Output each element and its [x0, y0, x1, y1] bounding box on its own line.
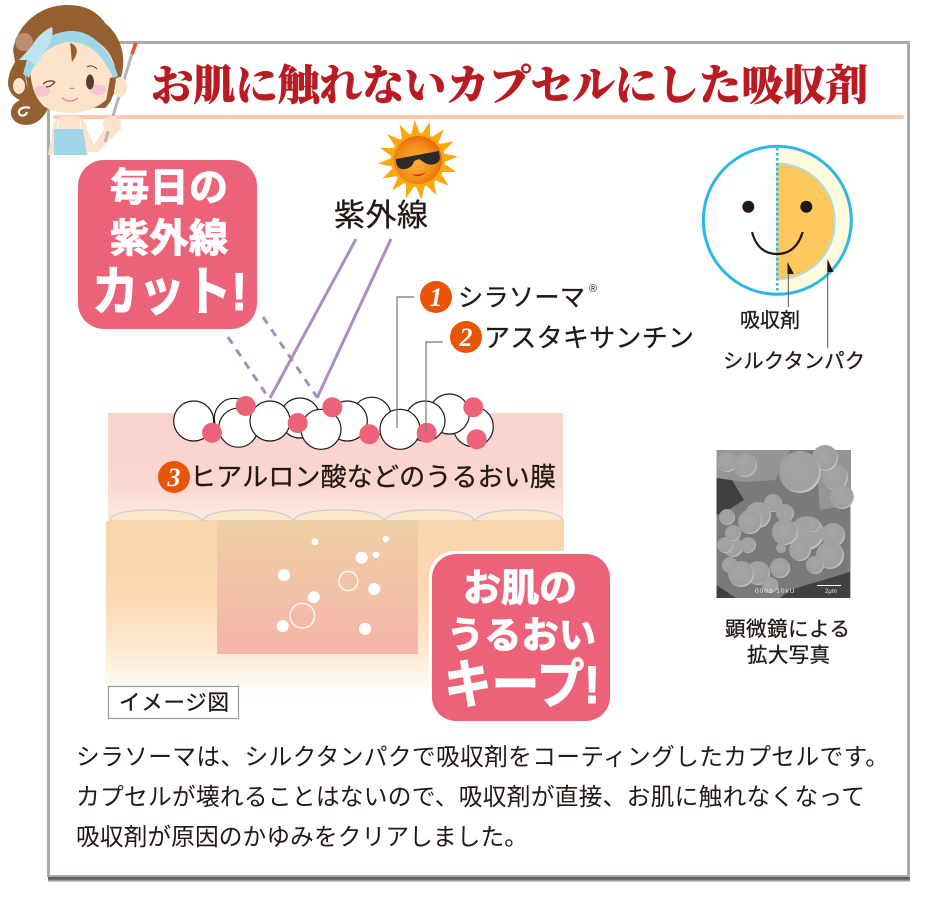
label 3: moisture film: 3 [166, 463, 180, 492]
hand [103, 116, 121, 132]
hair side locks [25, 68, 46, 109]
badge: daily UV cut: カット! [92, 263, 247, 322]
title underline [53, 115, 904, 119]
microscope photo [716, 445, 854, 598]
badge: keep moisture [429, 551, 612, 723]
icon: sun with sunglasses [375, 117, 461, 203]
badge: daily UV cut: 紫外線 [110, 218, 228, 261]
UV rays: dashed [228, 317, 317, 397]
label 1: cilasome: シラソーマ [458, 284, 585, 312]
label 1: cilasome [420, 281, 597, 313]
photo caption: 拡大写真 [747, 644, 830, 667]
body text: 吸収剤が原因のかゆみをクリアしました。 [76, 824, 528, 851]
label: absorbent: 吸収剤 [740, 309, 800, 332]
label 3: moisture film: ヒアルロン酸などのうるおい膜 [190, 462, 556, 492]
bubbles [277, 536, 389, 635]
hair [8, 5, 123, 125]
badge: keep moisture: うるおい [447, 615, 596, 656]
moisture film layer [108, 413, 563, 521]
ears [13, 78, 25, 94]
badge: daily UV cut: 毎日の [110, 167, 228, 210]
shoulders and dress [48, 116, 88, 155]
badge: daily UV cut [78, 160, 257, 329]
badge: keep moisture: お肌の [463, 568, 577, 610]
label: image figure [108, 686, 238, 718]
microscope photo: 0008 10kU [755, 588, 795, 595]
skin diagram [106, 413, 564, 697]
hair curl [19, 107, 30, 116]
photo caption: 顕微鏡による [725, 618, 850, 641]
label: image figure: イメージ図 [119, 691, 229, 715]
title: お肌に触れないカプセルにした吸収剤 [151, 63, 868, 110]
label: UV: 紫外線 [334, 198, 428, 233]
label 1: cilasome: 1 [430, 283, 442, 312]
pointer [105, 44, 135, 142]
body text: カプセルが壊れることはないので、吸収剤が直接、お肌に触れなくなって [76, 784, 865, 811]
inner dermis [217, 521, 418, 654]
UV rays: solid [228, 239, 391, 398]
label 2: astaxanthin: アスタキサンチン [484, 323, 694, 353]
headband [23, 31, 118, 78]
ribbon [19, 27, 53, 66]
skin cells [110, 510, 563, 521]
leader lines [397, 297, 443, 432]
body text: シラソーマは、シルクタンパクで吸収剤をコーティングしたカプセルです。 [76, 744, 889, 771]
face [25, 34, 116, 113]
label: silk protein: シルクタンパク [723, 350, 865, 373]
eyes and cheeks [34, 86, 50, 96]
label 1: cilasome: ® [589, 283, 597, 295]
icon: girl mascot with pointer [8, 5, 136, 155]
dermis gradient [106, 521, 564, 697]
microscope photo: 2μm [825, 589, 837, 595]
hair highlight [15, 33, 33, 51]
capsules [174, 394, 493, 449]
body text [76, 744, 889, 851]
label 2: astaxanthin: 2 [458, 323, 472, 352]
photo caption [725, 618, 850, 667]
body: arm [86, 120, 122, 152]
badge: keep moisture: キープ! [444, 656, 600, 715]
diagram: capsule smile cross-section [703, 146, 865, 373]
